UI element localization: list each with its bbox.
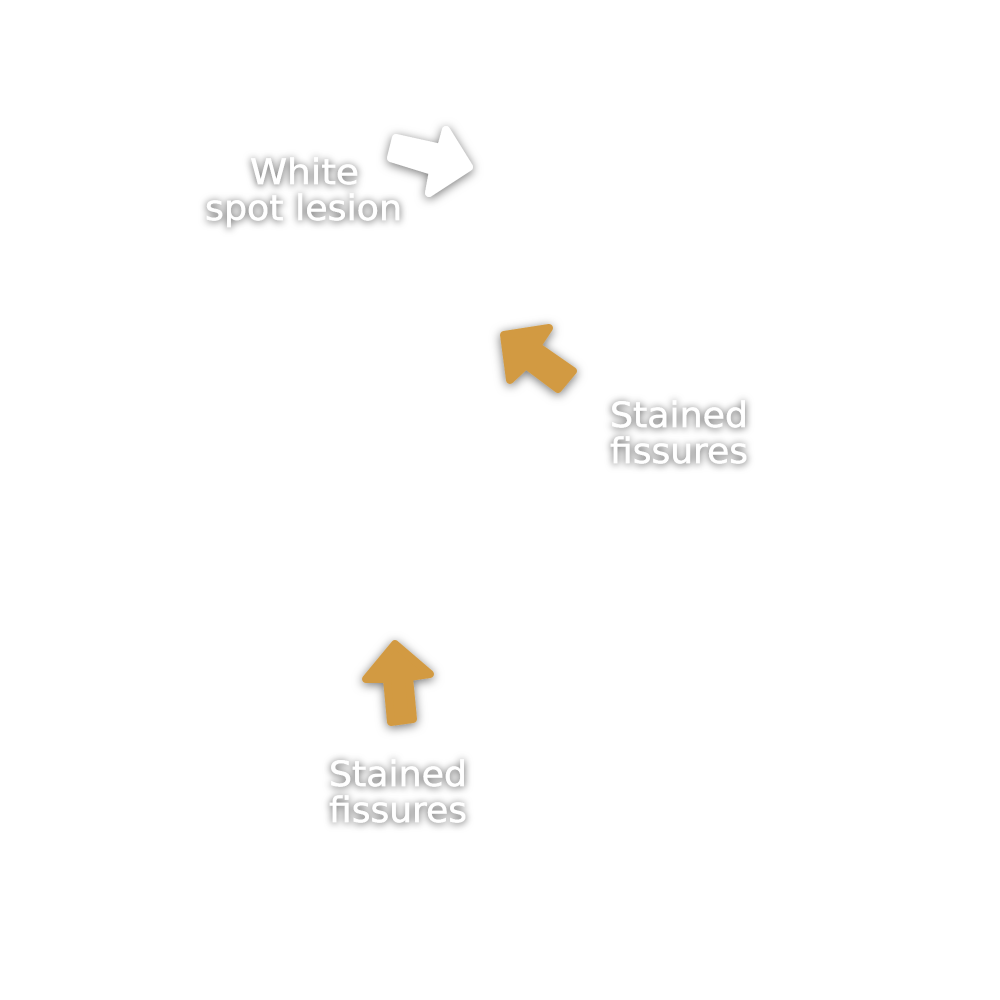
callout: stained fissures lower <box>329 644 467 831</box>
callout: white spot lesion <box>205 130 469 229</box>
arrow: white pointing right <box>391 130 469 193</box>
label: stained fissures lower <box>329 755 467 831</box>
arrow: ochre pointing upper left <box>504 328 573 389</box>
label: stained fissures lower: fissures <box>329 791 467 831</box>
label: white spot lesion: White <box>250 153 359 193</box>
label: white spot lesion: spot lesion <box>205 189 402 229</box>
label: stained fissures upper <box>610 396 748 472</box>
label: white spot lesion <box>205 153 402 229</box>
label: stained fissures upper: Stained <box>610 396 748 436</box>
label: stained fissures upper: fissures <box>610 432 748 472</box>
callout: stained fissures upper <box>504 328 748 472</box>
label: stained fissures lower: Stained <box>329 755 467 795</box>
arrow: ochre pointing up <box>366 644 430 722</box>
